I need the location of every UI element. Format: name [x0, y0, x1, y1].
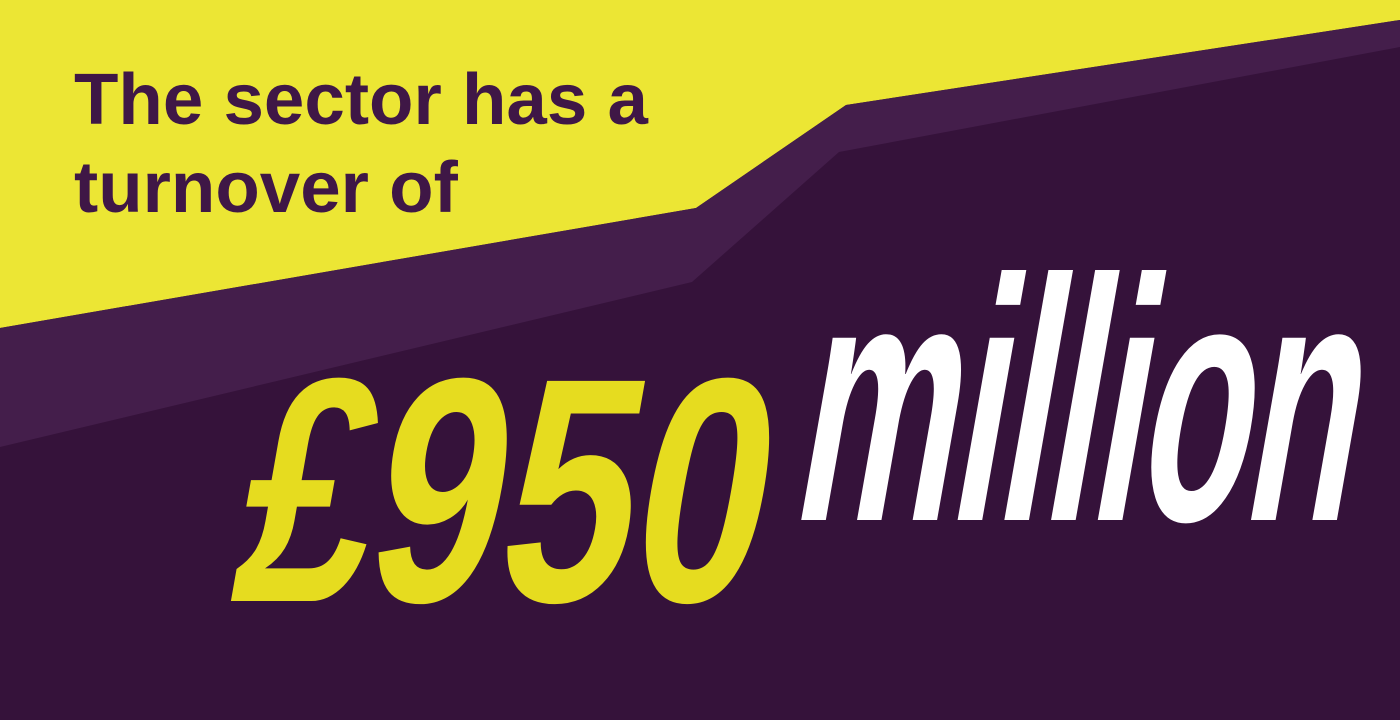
- amount: £950: £950: [215, 311, 805, 669]
- amount: million: million: [776, 209, 1400, 594]
- heading line 2: turnover of: [74, 148, 458, 228]
- heading line 1: The sector has a: [74, 60, 648, 140]
